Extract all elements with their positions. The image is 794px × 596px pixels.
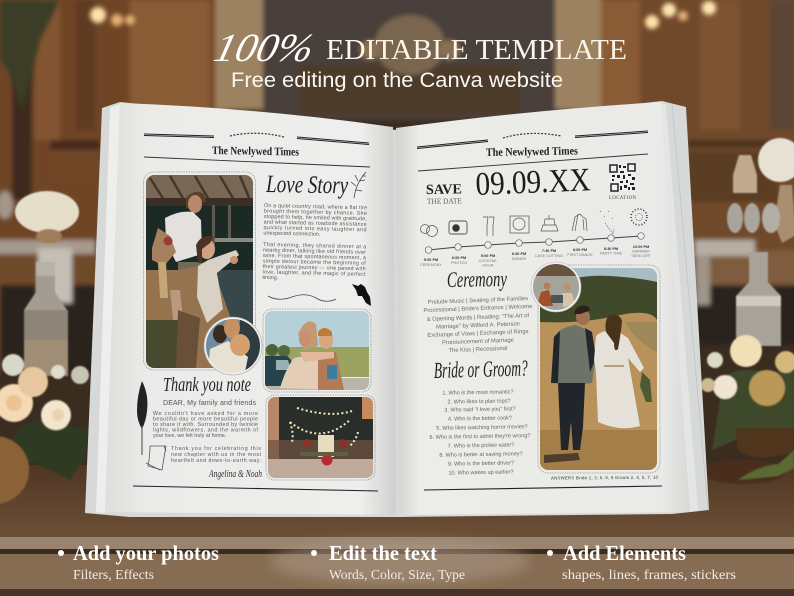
schedule timeline: PARTY TIME — [600, 252, 623, 256]
schedule timeline: CAKE CUTTING — [535, 254, 563, 258]
thank you note: your love, we felt truly at home. — [153, 433, 226, 439]
icon: cake — [541, 215, 558, 231]
love story text: On a quiet country road, where a flat tire — [264, 203, 367, 211]
right masthead — [417, 131, 648, 171]
feature: add elements: shapes, lines, frames, stickers — [562, 568, 736, 583]
icon: scroll — [146, 446, 166, 470]
flourish divider and cupid — [268, 284, 371, 306]
feature: edit the text: Words, Color, Size, Type — [329, 568, 465, 583]
bride or groom quiz — [429, 356, 531, 477]
love story text: nearby diner, talking like old friends over — [263, 247, 366, 256]
photo: couple on car — [263, 309, 371, 392]
thank you note: new chapter with us in the most — [171, 452, 262, 458]
right masthead: The Newlywed Times — [486, 145, 578, 159]
love story text: quickly turned into easy laughter and — [263, 225, 367, 233]
love story text: timing. — [262, 275, 278, 281]
bride or groom quiz: 7. Who is the pickier eater? — [448, 442, 514, 450]
bride or groom quiz: Bride or Groom? — [433, 356, 528, 383]
bride or groom quiz: 3. Who said "I love you" first? — [444, 406, 516, 414]
ceremony section: Exchange of Vows | Exchange of Rings — [427, 329, 529, 339]
photo: couple walking in field — [538, 265, 660, 473]
schedule timeline: 5:00 PM — [481, 254, 495, 258]
page stack behind — [85, 101, 709, 517]
schedule timeline: PHOTOS — [451, 261, 467, 265]
schedule timeline — [420, 233, 651, 268]
thank you note: DEAR, My family and friends — [163, 400, 256, 407]
thank you note: We couldn't have asked for a more — [153, 411, 258, 417]
icon: place setting — [510, 216, 529, 233]
schedule timeline: 10:00 PM — [633, 245, 649, 249]
feature: add your photos: Add your photos — [73, 541, 219, 565]
left masthead: The Newlywed Times — [212, 145, 300, 159]
feature: edit the text: Edit the text — [329, 541, 437, 565]
save the date — [426, 162, 591, 206]
love story text: unexpected connection. — [263, 230, 320, 238]
thank you note: Thank you note — [163, 374, 251, 396]
left masthead — [144, 133, 370, 167]
bride or groom quiz: 2. Who likes to plan trips? — [447, 398, 511, 406]
right bottle and flowers — [701, 252, 794, 484]
icon: champagne glasses — [483, 217, 494, 236]
feature: edit the text — [311, 541, 465, 583]
thank you note: Thank you for celebrating this — [171, 446, 261, 452]
schedule timeline: HOUR — [482, 264, 494, 268]
right page — [396, 102, 690, 515]
bride or groom quiz: 5. Who likes watching horror movies? — [436, 424, 528, 432]
love story text: their greatest journey — one paved with — [263, 264, 366, 272]
icon: feather — [137, 381, 147, 455]
left footer rule — [133, 486, 378, 491]
answers line: ANSWERS Bride 1, 3, 6, 8, 9 Groom 2, 4, 5, 7, 10 — [551, 475, 659, 480]
left page — [105, 103, 396, 515]
icon: camera — [449, 221, 467, 234]
schedule timeline: 6:00 PM — [452, 256, 466, 260]
bride or groom quiz: 1. Who is the most romantic? — [442, 389, 514, 397]
love story text: wine. From that spontaneous moment, a — [262, 253, 366, 261]
icon: rings — [420, 224, 438, 236]
ceremony section: The Kiss | Recessional — [448, 346, 507, 354]
bride or groom quiz: 10. Who wakes up earlier? — [448, 469, 514, 477]
love story text: stopped to help, he smiled with gratitude, — [264, 214, 367, 222]
timeline icons — [420, 209, 647, 236]
icon: party popper — [600, 211, 614, 234]
thank you note: beautiful day or more beautiful people — [153, 416, 258, 422]
love story heading: Love Story — [265, 171, 349, 199]
right footer rule — [424, 486, 662, 490]
photo inset: kiss circle — [204, 317, 264, 377]
photo: string lights table — [266, 395, 375, 480]
schedule timeline: 8:30 PM — [604, 247, 618, 251]
save the date: SAVE — [426, 182, 462, 198]
schedule timeline: 5:00 PM — [424, 258, 438, 262]
ceremony section: & Opening Words | Reading: "The Art of — [427, 313, 530, 323]
love story text — [261, 203, 368, 283]
love story text: brought them together by chance. She — [264, 208, 367, 217]
schedule timeline: DINNER — [512, 257, 527, 261]
thank you note — [153, 374, 262, 480]
title: 100% editable template: 100% — [210, 26, 319, 70]
schedule timeline: SEND-OFF — [631, 254, 651, 258]
schedule timeline: 8:00 PM — [573, 248, 587, 252]
love story text: and what started as roadside assistance — [264, 219, 367, 228]
schedule timeline: 7:30 PM — [542, 249, 556, 253]
wooden table with caption band — [0, 465, 794, 596]
save the date: THE DATE — [427, 196, 462, 206]
title: 100% editable template: EDITABLE TEMPLATE — [326, 35, 627, 66]
thank you note: to share it with. Surrounded by twinkle — [153, 422, 258, 428]
QR code: LOCATION — [609, 196, 637, 201]
photo: couple by the bridge — [144, 172, 256, 370]
ceremony section: Pronouncement of Marriage — [442, 338, 514, 346]
ceremony section: Processional | Bride's Entrance | Welcome — [423, 304, 533, 314]
schedule timeline: FIRST DANCE — [567, 253, 593, 257]
ceremony section: Ceremony — [447, 266, 507, 292]
feature: add elements: Add Elements — [563, 541, 686, 565]
thank you note: lights, wildflowers, and the warmth of — [153, 428, 259, 434]
save the date: 09.09.XX — [475, 162, 591, 203]
schedule timeline: SHIMMER — [632, 250, 650, 254]
thank you note: heartfelt and down-to-earth way. — [171, 458, 261, 464]
schedule timeline: COCKTAIL — [479, 259, 497, 263]
ceremony section: Prelude Music | Seating of the Families — [428, 296, 528, 306]
icon: dancing couple — [572, 214, 587, 231]
bride or groom quiz: 8. Who is better at saving money? — [439, 451, 523, 459]
greenery top left — [0, 0, 60, 110]
left bottle and flowers — [0, 262, 89, 504]
icon: sparkler — [631, 209, 647, 225]
photo inset: couple at table circle — [531, 262, 581, 312]
love story text: love, laughter, and the magic of perfect — [262, 269, 366, 278]
ceremony section: Marriage" by Wilferd A. Peterson — [436, 321, 520, 331]
icon: laurel sprig — [351, 172, 366, 198]
feature: add elements — [547, 541, 736, 583]
title: 100% editable template — [210, 26, 627, 70]
open newspaper — [85, 101, 709, 517]
feature: add your photos: Filters, Effects — [73, 568, 154, 583]
QR code — [609, 164, 637, 201]
feature: add your photos — [58, 541, 219, 583]
bride or groom quiz: 9. Who is the better driver? — [448, 460, 514, 468]
ceremony section — [423, 266, 533, 354]
love story text: simple detour became the beginning of — [263, 258, 366, 267]
bride or groom quiz: 6. Who is the first to admit they're wrong? — [429, 433, 531, 441]
schedule timeline: 6:30 PM — [512, 252, 526, 256]
love story text: That evening, they shared dinner at a — [263, 242, 366, 250]
bride or groom quiz: 4. Who is the better cook? — [448, 415, 512, 423]
schedule timeline: CEREMONY — [420, 263, 442, 267]
subtitle: Free editing on the Canva website — [231, 69, 563, 92]
thank you note: Angelina & Noah — [208, 469, 262, 480]
